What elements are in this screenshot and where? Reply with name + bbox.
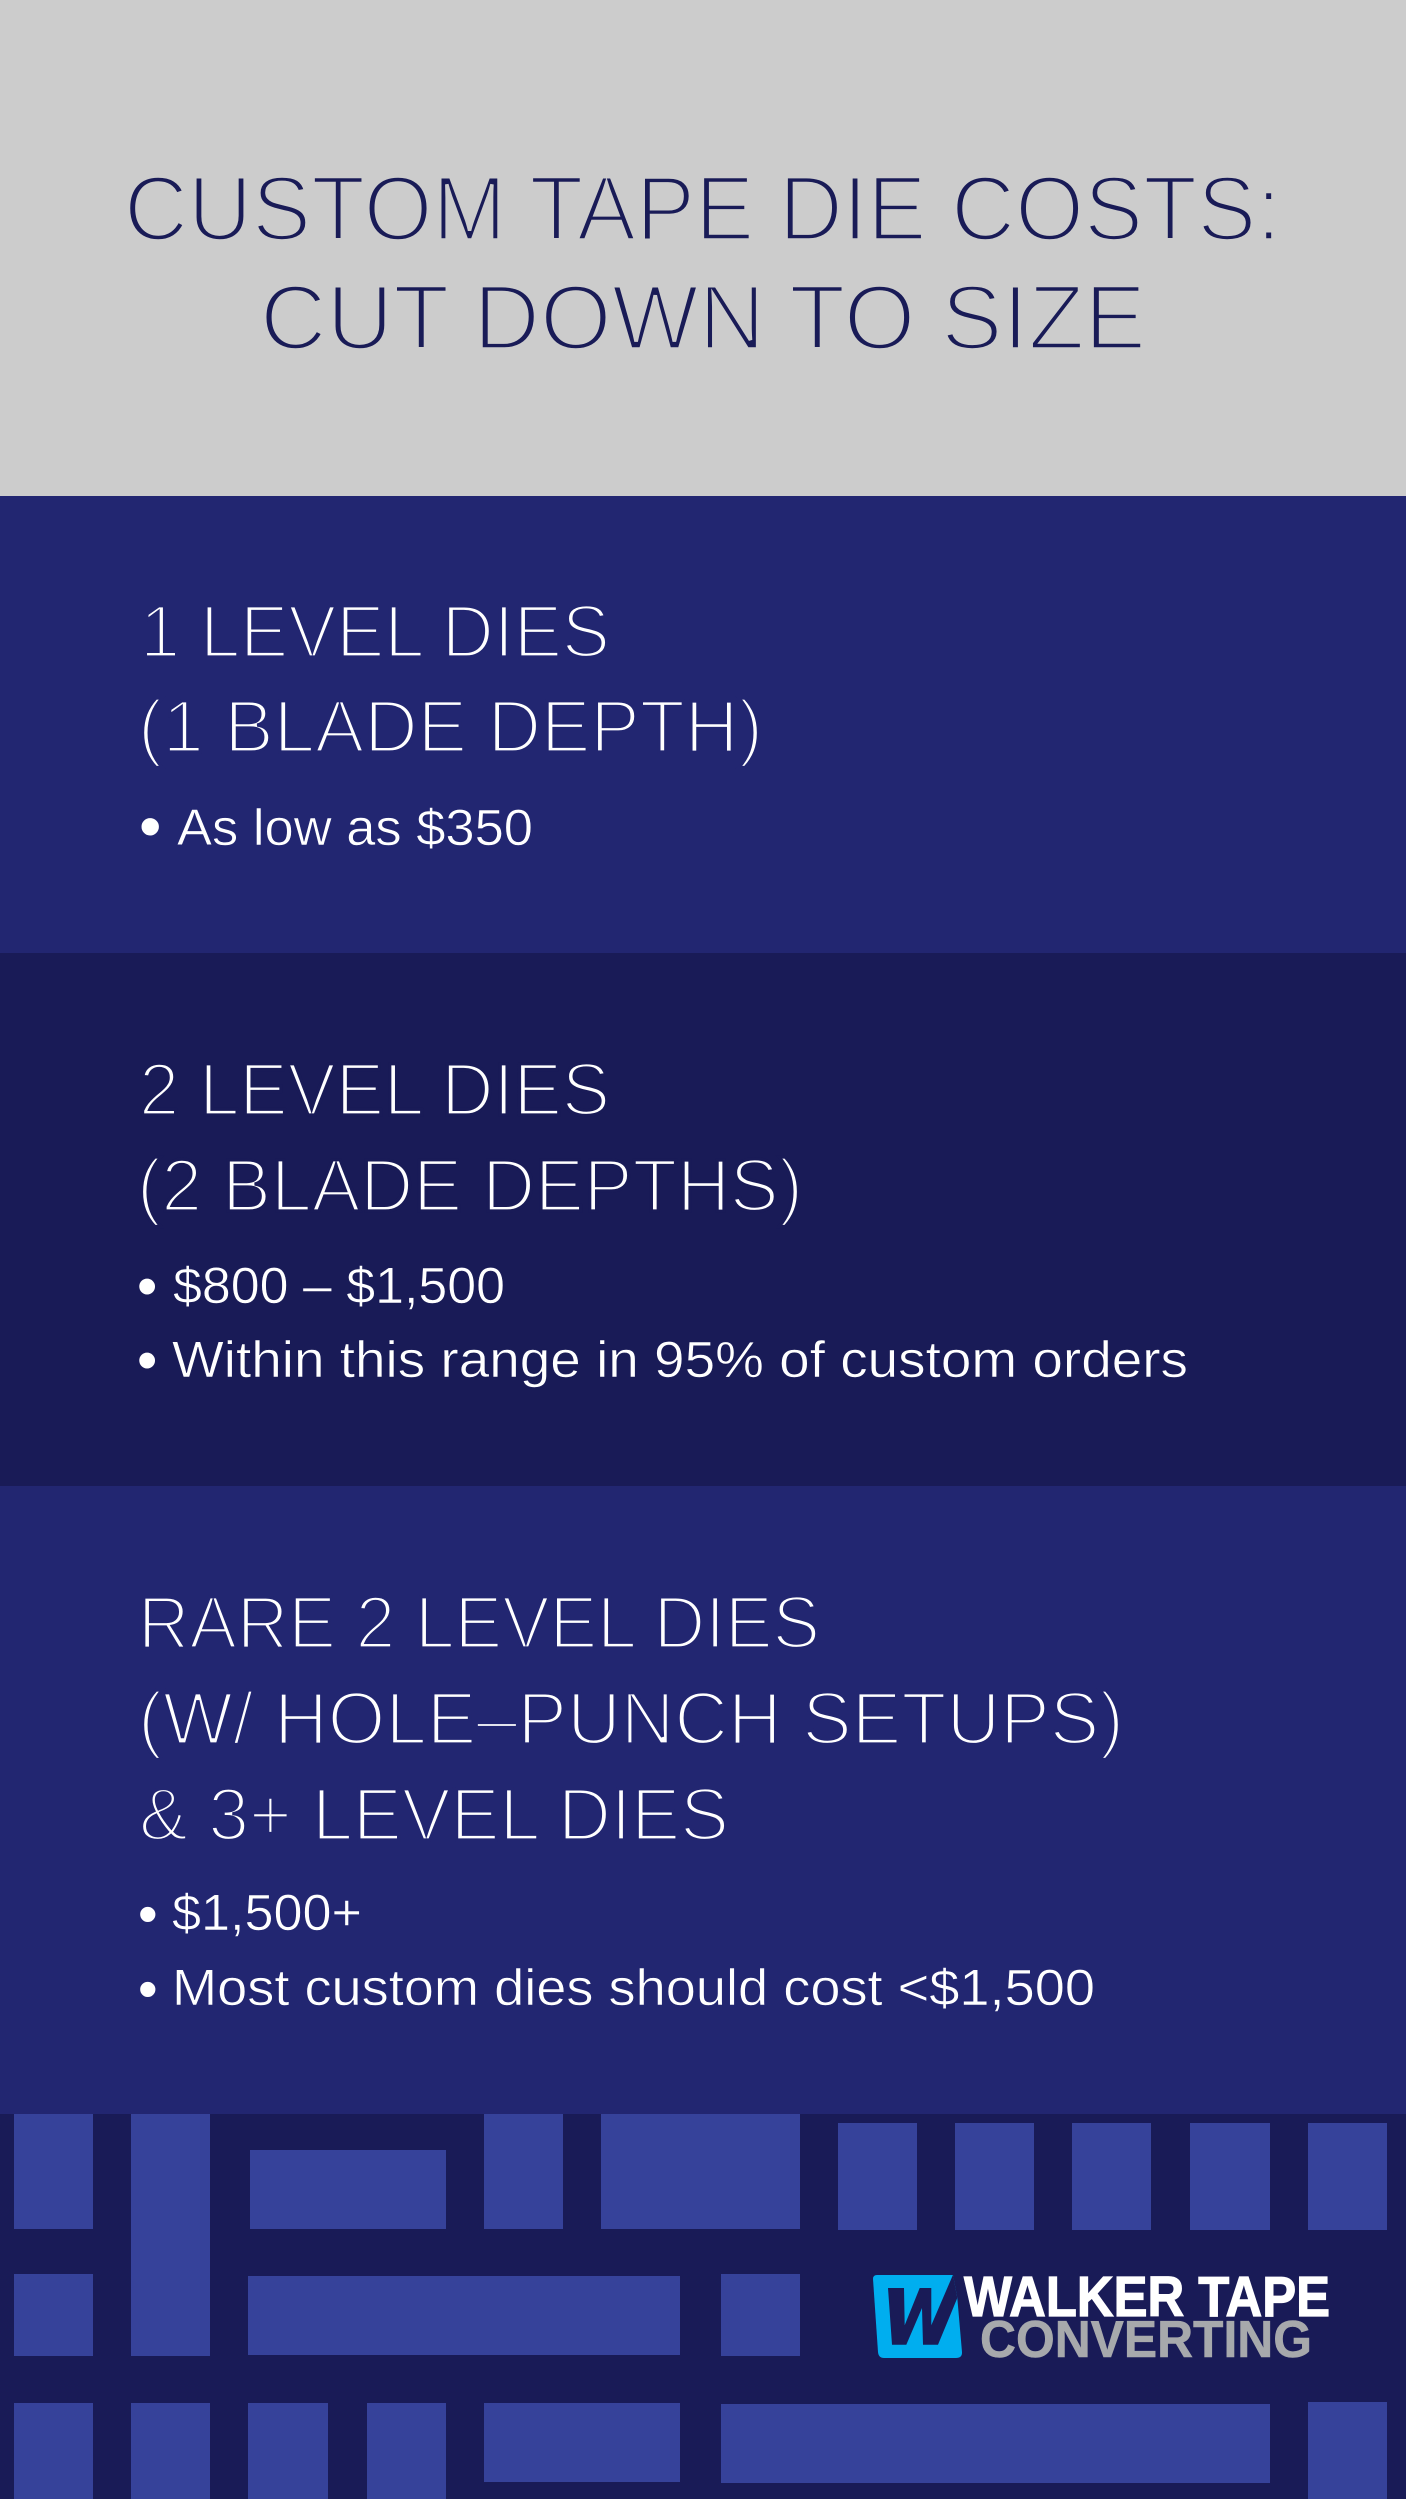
heading: 2 level dies: (2 BLADE DEPTHS) bbox=[137, 1144, 803, 1227]
bullet: within range share: Within this range in 95% of custom orders bbox=[172, 1331, 1188, 1388]
bullet: price range: • bbox=[137, 1254, 157, 1319]
bullet: as low as $350: • bbox=[139, 790, 161, 862]
heading: 2 level dies: 2 LEVEL DIES bbox=[139, 1048, 610, 1131]
bullet: as low as $350 bbox=[139, 790, 533, 862]
icon: W badge bbox=[873, 2275, 962, 2358]
title: CUSTOM TAPE DIE COSTS: bbox=[124, 158, 1281, 260]
logo wordmark bbox=[964, 2265, 1330, 2369]
title: CUT DOWN TO SIZE bbox=[260, 267, 1146, 369]
logo: Walker Tape Converting bbox=[873, 2265, 1330, 2369]
bullet: most custom dies: Most custom dies should cost <$1,500 bbox=[172, 1959, 1095, 2016]
title bbox=[124, 158, 1281, 369]
panel: 2 level dies bbox=[0, 953, 1406, 1486]
heading: rare dies: & 3+ LEVEL DIES bbox=[139, 1773, 729, 1856]
bullet: $1,500+: • bbox=[138, 1882, 158, 1945]
bullet: most custom dies: • bbox=[138, 1957, 158, 2020]
panel: rare 2 level and 3+ level dies bbox=[0, 1486, 1406, 2114]
heading: 1 level dies: 1 LEVEL DIES bbox=[140, 590, 610, 673]
bullet: within range share: • bbox=[137, 1328, 157, 1393]
panel: 1 level dies bbox=[0, 496, 1406, 953]
heading: 1 level dies bbox=[138, 590, 763, 768]
heading: 1 level dies: (1 BLADE DEPTH) bbox=[138, 685, 763, 768]
bullet: as low as $350: As low as $350 bbox=[177, 799, 533, 856]
heading: 2 level dies bbox=[137, 1048, 803, 1227]
logo wordmark: WALKER TAPE bbox=[964, 2265, 1330, 2329]
heading: rare dies: (W/ HOLE–PUNCH SETUPS) bbox=[138, 1677, 1124, 1760]
bullet: $1,500+: $1,500+ bbox=[172, 1884, 362, 1941]
bullet: price range: $800 – $1,500 bbox=[173, 1257, 505, 1314]
heading: rare dies bbox=[138, 1581, 1124, 1856]
panel: footer bbox=[0, 2114, 1406, 2499]
heading: rare dies: RARE 2 LEVEL DIES bbox=[138, 1581, 820, 1664]
panel: title header bbox=[0, 0, 1406, 496]
die block pattern bbox=[14, 2114, 1387, 2499]
logo wordmark: CONVERTING bbox=[980, 2311, 1312, 2369]
